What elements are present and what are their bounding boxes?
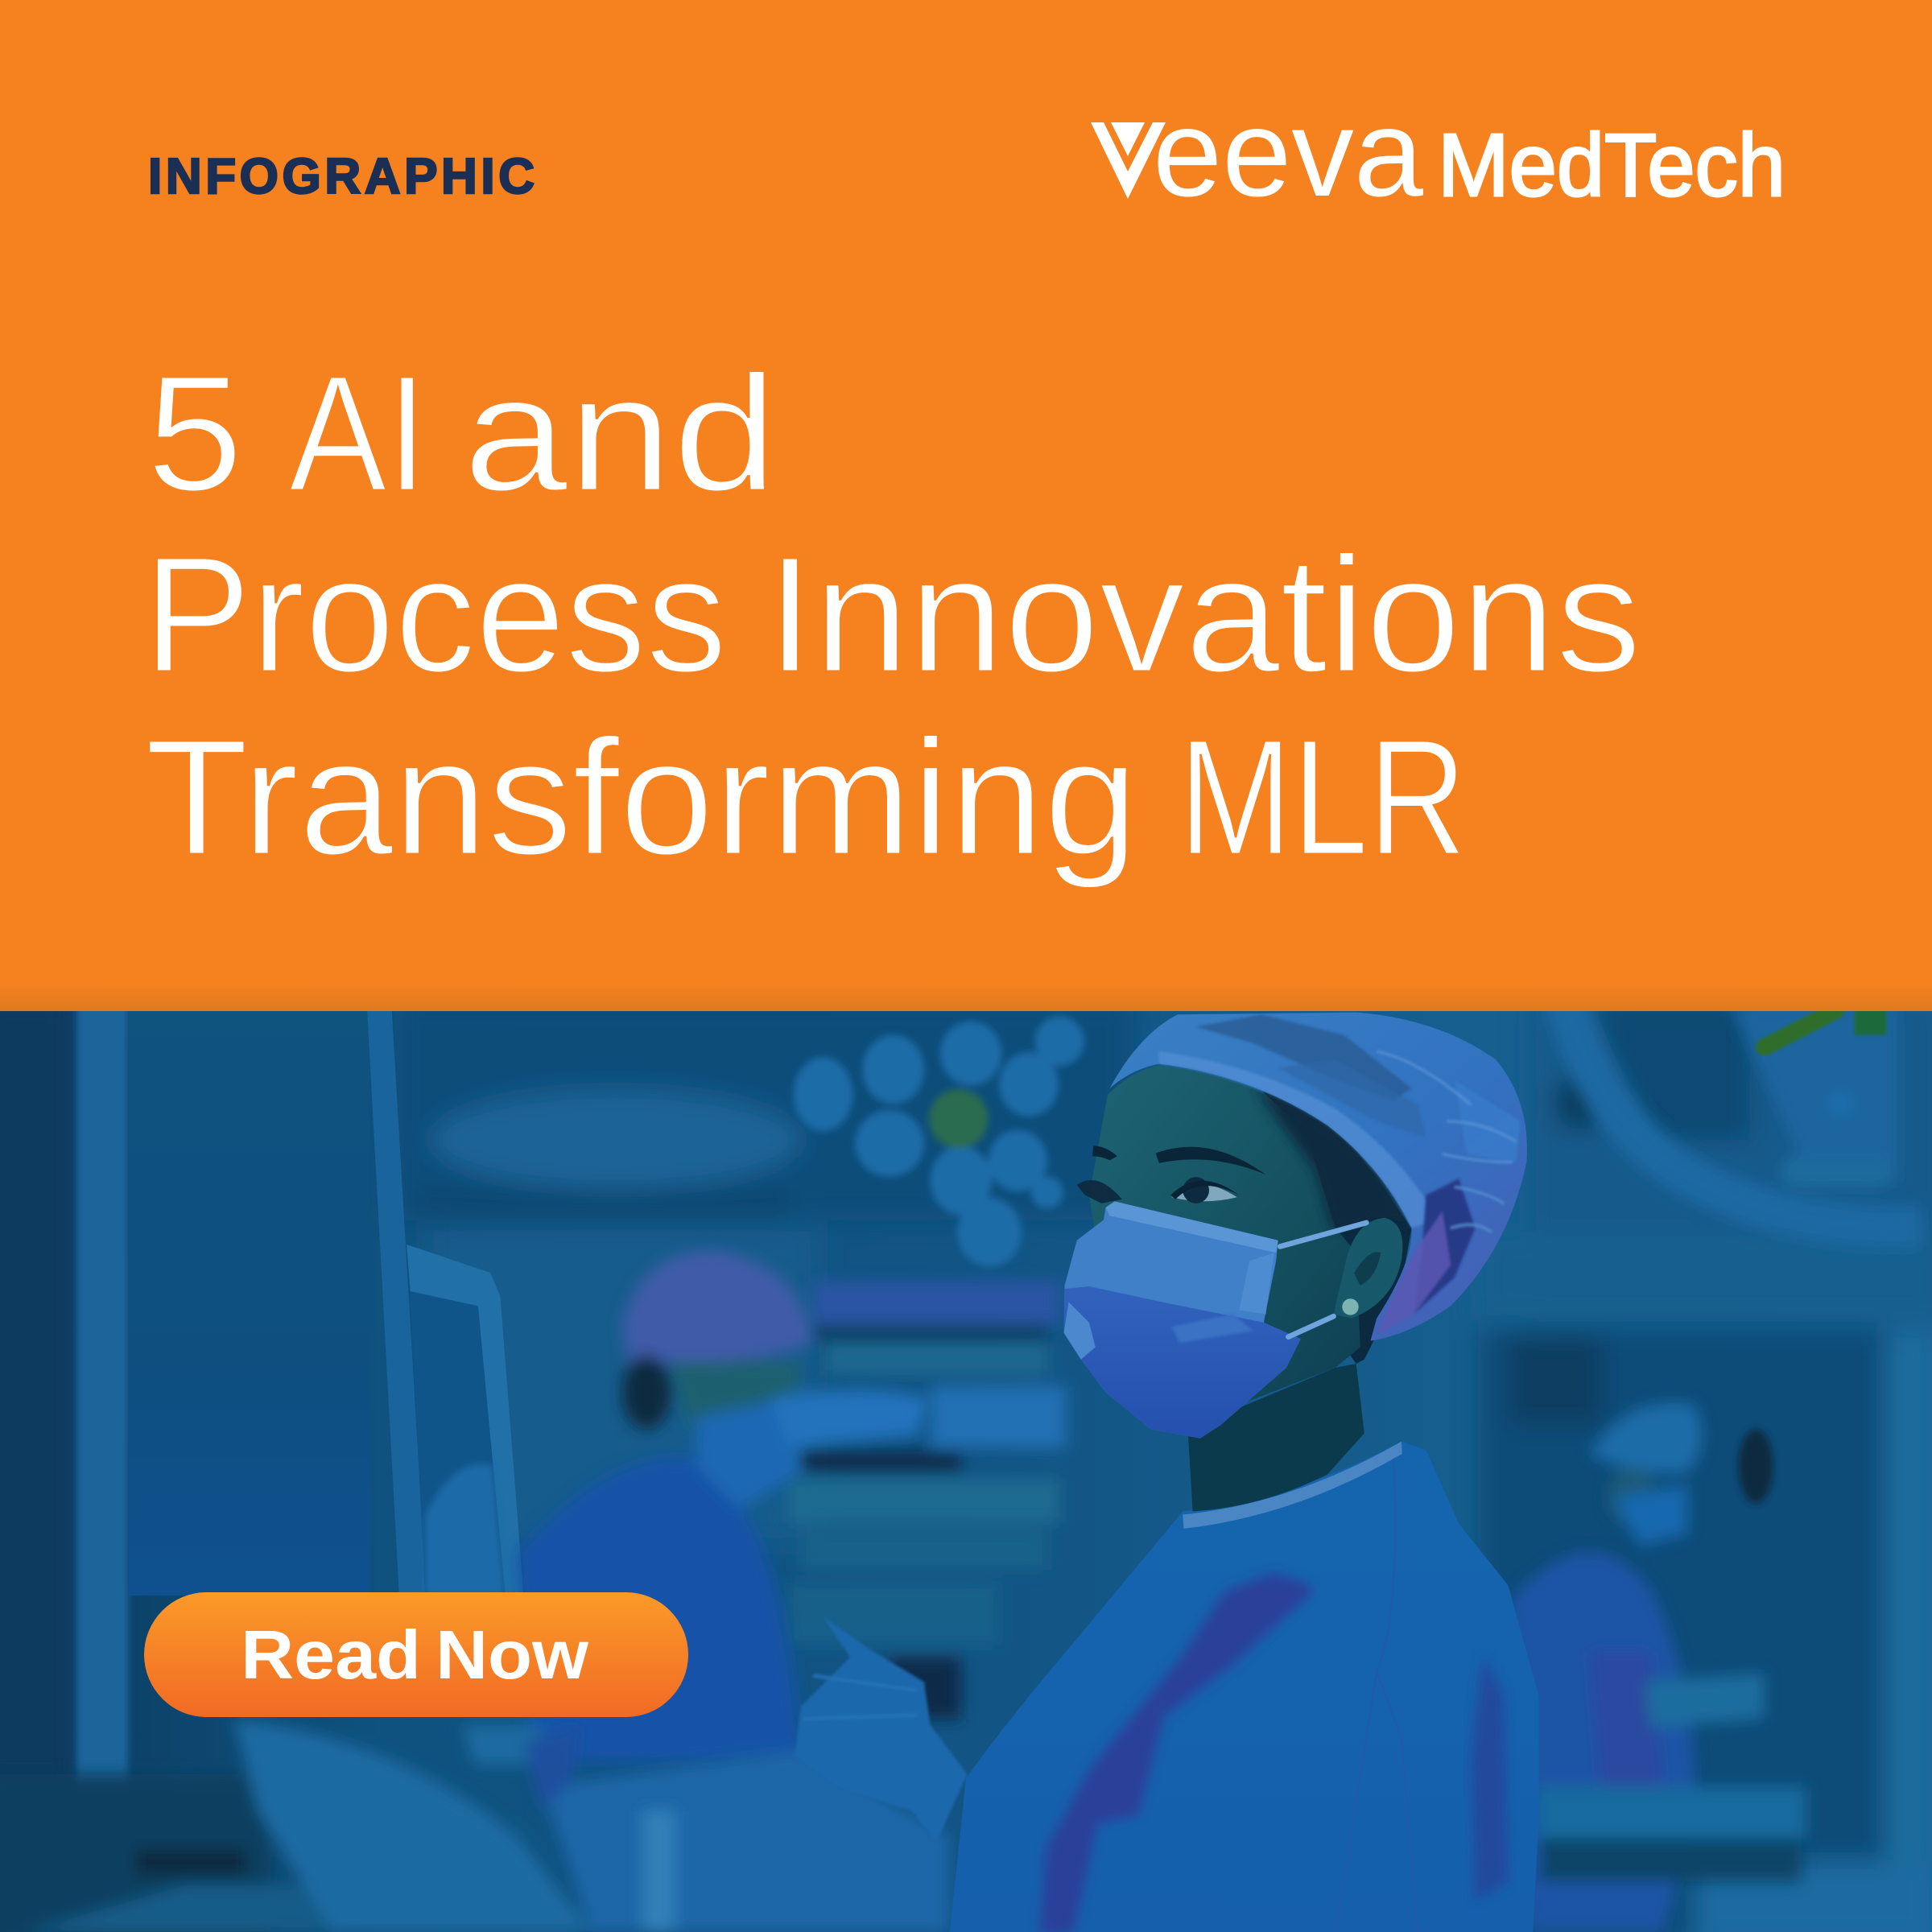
label: INFOGRAPHIC: INFOGRAPHIC <box>148 149 535 204</box>
surgeon: hair behind <box>1261 1088 1412 1364</box>
surgeon: ear <box>1334 1218 1402 1319</box>
surgeon: face <box>1089 1066 1360 1409</box>
surgeon: cap <box>1110 1013 1527 1341</box>
icon: Veeva V mark <box>1091 122 1166 199</box>
background: lamp arm <box>1565 998 1922 1227</box>
surgeon: gown <box>950 1442 1539 1932</box>
title: Innovations <box>766 522 1641 707</box>
main surgeon <box>950 1013 1539 1932</box>
surgeon: mask straps <box>1280 1223 1366 1337</box>
gown: sleeve seam <box>1335 1450 1418 1932</box>
surgeon: cap band <box>1159 1051 1439 1228</box>
title: MLR <box>1179 705 1467 890</box>
surgeon: earring <box>1342 1298 1359 1315</box>
background: shelves and equipment <box>789 1282 1066 1719</box>
background: lamp head <box>1731 1004 1897 1187</box>
hand <box>795 1616 968 1842</box>
background: wall column and monitor <box>76 998 524 1848</box>
button: Read Now <box>144 1592 688 1717</box>
logo wordmark: eeva: eeva <box>1153 84 1423 222</box>
title <box>143 341 1641 890</box>
title: Process <box>143 522 727 707</box>
title: AI <box>289 341 427 526</box>
logo wordmark: MedTech: MedTech <box>1438 116 1785 215</box>
background: left colleague <box>518 1251 931 1762</box>
background: green lamp detail <box>1765 1008 1886 1047</box>
gown: collar <box>1183 1442 1402 1529</box>
background: right colleague <box>1509 1402 1806 1932</box>
foreground: blurred hands and equipment <box>0 1719 949 1932</box>
button: Read Now: Read <box>241 1617 421 1694</box>
gown: dark fold <box>1040 1573 1311 1932</box>
title: and <box>463 341 778 526</box>
surgeon: hairline <box>1253 1086 1412 1232</box>
title: Transforming <box>145 705 1138 890</box>
background: dark door opening <box>1739 1429 1773 1503</box>
background: blurred operating room <box>0 998 1932 1932</box>
photo: surgeon in operating room with blue duotone <box>0 998 1932 1932</box>
orange header panel <box>0 0 1932 1011</box>
gown: right shadow <box>1471 1655 1508 1901</box>
surgeon: eyes and brows <box>1077 1146 1265 1203</box>
surgeon: mask <box>1063 1201 1301 1439</box>
button: Read Now: Now <box>436 1617 589 1694</box>
surgeon: cap folds <box>1196 1014 1521 1335</box>
title: 5 <box>147 341 243 526</box>
surgeon: neck <box>1187 1364 1364 1511</box>
background: surgical lights <box>794 1017 1084 1266</box>
logo: Veeva MedTech <box>1091 84 1785 222</box>
